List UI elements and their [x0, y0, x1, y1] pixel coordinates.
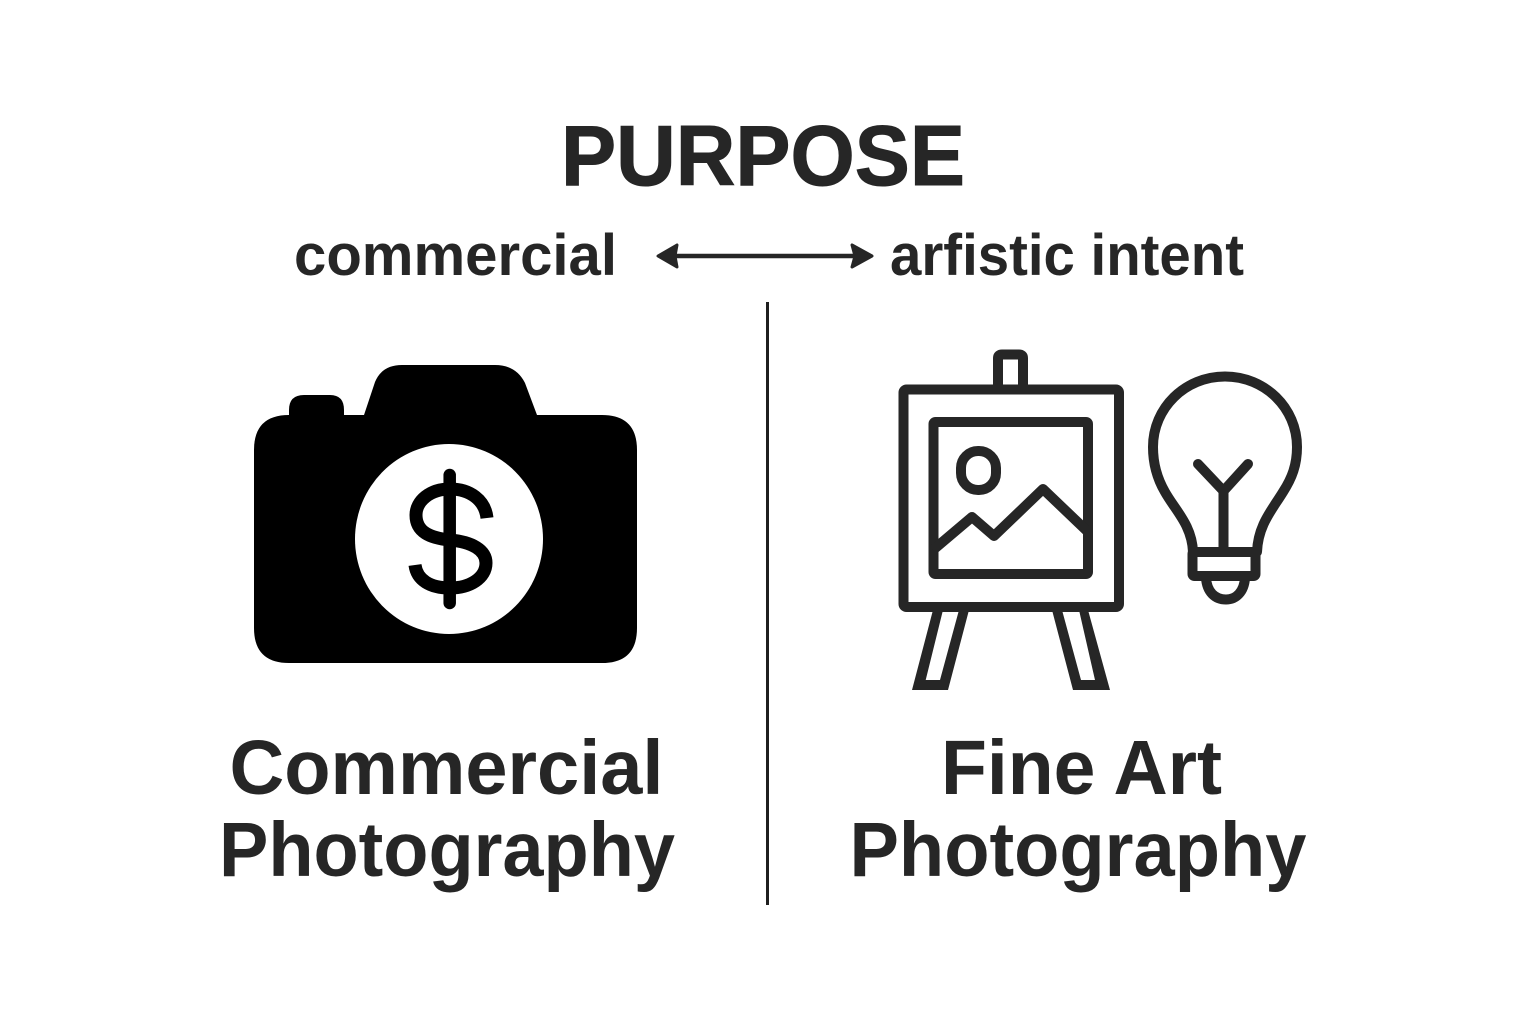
- picture frame: [934, 422, 1088, 574]
- label: artistic intent: arfistic intent: [890, 223, 1244, 288]
- heading: commercial photography: Commercial: [230, 725, 664, 811]
- icon: light bulb: [1153, 376, 1297, 600]
- picture sun: [961, 451, 996, 490]
- easel left leg: [912, 610, 969, 690]
- heading: fine art photography: [850, 725, 1307, 893]
- label: commercial: commercial: [294, 223, 617, 288]
- picture mountains: [933, 489, 1088, 550]
- heading: commercial photography: Photography: [219, 807, 675, 893]
- easel right leg: [1052, 610, 1110, 690]
- heading: fine art photography: Photography: [850, 807, 1307, 893]
- icon: camera with dollar sign: [254, 365, 637, 663]
- heading: fine art photography: Fine Art: [941, 725, 1222, 811]
- heading: commercial photography: [219, 725, 675, 893]
- icon: easel with framed picture: [904, 354, 1119, 690]
- arrow: double-headed spectrum: [658, 245, 872, 267]
- easel board: [904, 390, 1119, 607]
- easel top peg: [998, 354, 1023, 388]
- center divider: [766, 302, 769, 905]
- title: PURPOSE: [561, 109, 965, 204]
